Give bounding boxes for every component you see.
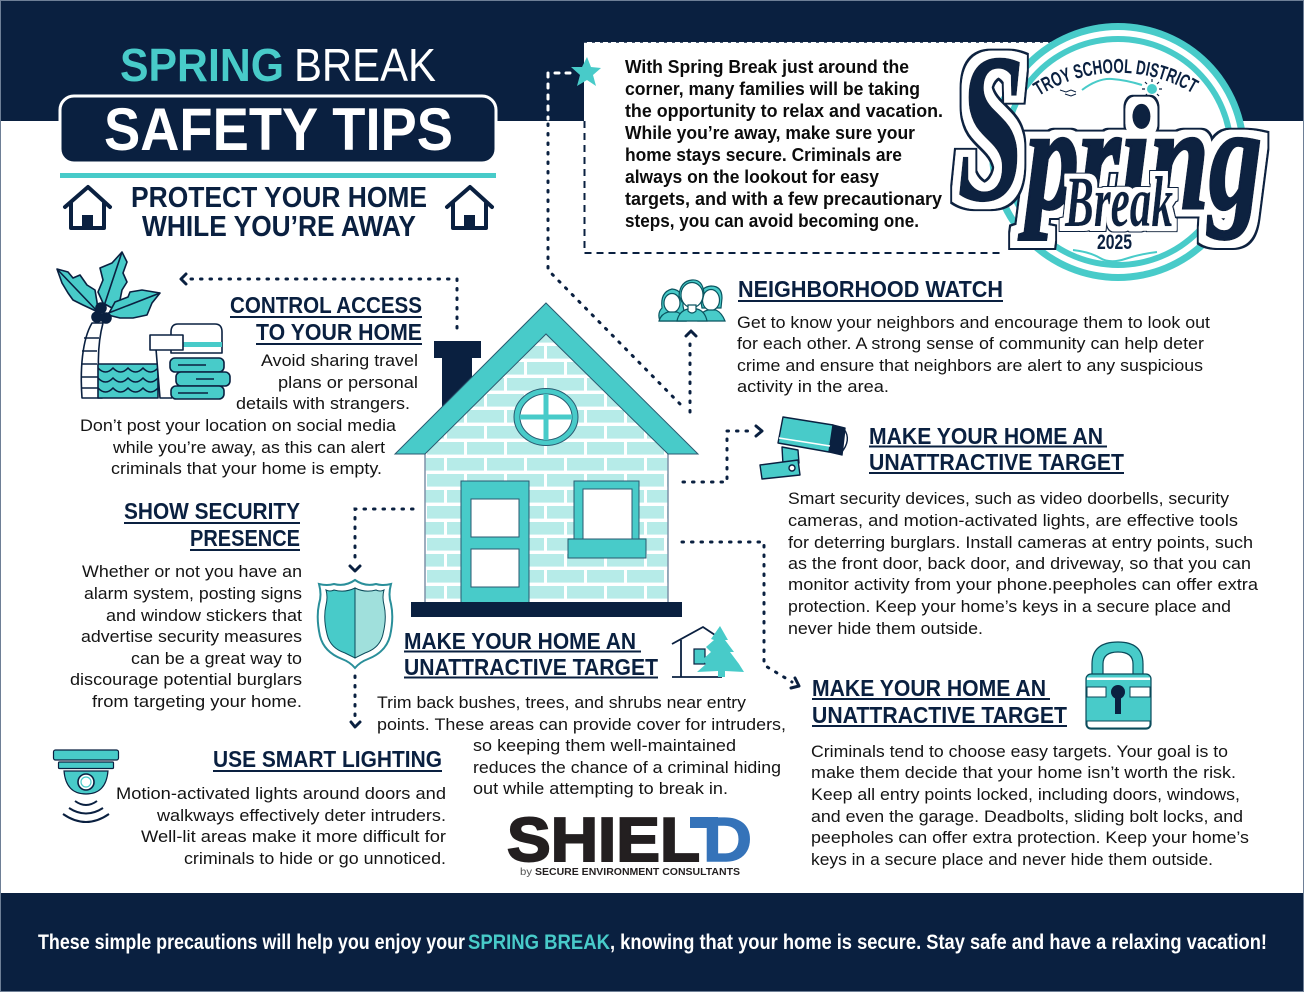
body: Whether or not you have an bbox=[82, 562, 302, 581]
subtitle: protect your home: PROTECT YOUR HOME bbox=[131, 182, 427, 214]
body bbox=[116, 784, 446, 868]
title: safety tips box: SAFETY TIPS bbox=[104, 96, 453, 163]
body bbox=[70, 562, 302, 711]
body: keys in a secure place and never hide them outside. bbox=[811, 850, 1213, 869]
body bbox=[737, 313, 1210, 396]
section: show security presence bbox=[70, 498, 302, 711]
body: for deterring burglars. Install cameras at entry points, such bbox=[788, 533, 1253, 552]
body: Smart security devices, such as video doorbells, security bbox=[788, 489, 1230, 508]
door bbox=[461, 481, 529, 603]
heading: PRESENCE bbox=[190, 525, 300, 551]
intro text bbox=[625, 57, 943, 231]
footer message: SPRING BREAK bbox=[468, 931, 610, 954]
logo: shield by secure environment consultants: by bbox=[520, 867, 532, 878]
icon: padlock bbox=[1086, 642, 1151, 729]
heading bbox=[869, 423, 1124, 475]
body bbox=[788, 489, 1259, 638]
body: Criminals tend to choose easy targets. Your goal is to bbox=[811, 742, 1228, 761]
heading bbox=[230, 292, 422, 345]
icon: security camera bbox=[760, 417, 847, 479]
body: Get to know your neighbors and encourage them to look out bbox=[737, 313, 1210, 332]
heading: TO YOUR HOME bbox=[256, 319, 422, 345]
section: easy targets bbox=[811, 675, 1249, 869]
icon: house left bbox=[65, 187, 110, 228]
heading: CONTROL ACCESS bbox=[230, 292, 422, 318]
body: so keeping them well-maintained bbox=[473, 736, 736, 755]
logo: spring break badge: TROY SCHOOL DISTRICT bbox=[1032, 58, 1200, 94]
logo: spring break badge: S bbox=[957, 8, 1025, 247]
body: walkways effectively deter intruders. bbox=[156, 806, 446, 825]
title: spring break bbox=[120, 39, 436, 91]
body: and window stickers that bbox=[106, 606, 302, 625]
dashed arrow: to security camera bbox=[683, 426, 762, 482]
heading: SHOW SECURITY bbox=[124, 498, 300, 524]
section: use smart lighting bbox=[116, 746, 446, 868]
logo: spring break badge: Break bbox=[1064, 162, 1173, 242]
section: control access bbox=[80, 292, 422, 478]
square window bbox=[568, 481, 646, 558]
body: monitor activity from your phone.peepholes can offer extra bbox=[788, 575, 1259, 594]
dashed arrow: star to neighborhood bbox=[548, 73, 696, 412]
logo: spring break badge bbox=[950, 8, 1270, 281]
roof bbox=[395, 303, 698, 454]
body: protection. Keep your home’s keys in a secure place and bbox=[788, 597, 1231, 616]
intro text: always on the lookout for easy bbox=[625, 167, 879, 187]
logo: spring break badge: 2025 bbox=[1097, 231, 1132, 254]
intro dashed panel bbox=[584, 42, 1054, 254]
body bbox=[811, 742, 1249, 869]
dashed arrow: to control access bbox=[181, 274, 457, 328]
body bbox=[377, 693, 786, 798]
title: spring break: BREAK bbox=[294, 39, 436, 91]
body: Keep all entry points locked, including doors, windows, bbox=[811, 785, 1240, 804]
icon: house and tree bbox=[672, 626, 744, 677]
section: bushes and trees bbox=[377, 628, 786, 798]
heading: MAKE YOUR HOME AN bbox=[812, 675, 1046, 701]
footer band bbox=[0, 893, 1304, 992]
icon: shield bbox=[318, 580, 392, 668]
logo: shield by secure environment consultants: D bbox=[703, 806, 752, 875]
dashed arrow: below shield bbox=[351, 676, 360, 727]
body: Trim back bushes, trees, and shrubs near entry bbox=[377, 693, 747, 712]
icon: dome camera bbox=[54, 750, 118, 822]
body: and even the garage. Deadbolts, sliding bolt locks, and bbox=[811, 807, 1243, 826]
body: while you’re away, as this can alert bbox=[112, 438, 385, 457]
heading: UNATTRACTIVE TARGET bbox=[869, 449, 1124, 475]
brick gable and walls bbox=[425, 334, 668, 603]
body: as the front door, back door, and driveway, so that you can bbox=[788, 554, 1251, 573]
body: make them decide that your home isn’t worth the risk. bbox=[811, 763, 1236, 782]
body: out while attempting to break in. bbox=[473, 779, 728, 798]
body: points. These areas can provide cover for intruders, bbox=[377, 715, 786, 734]
round window bbox=[514, 388, 578, 446]
intro text: the opportunity to relax and vacation. bbox=[625, 101, 943, 121]
body: discourage potential burglars bbox=[70, 670, 302, 689]
intro text: steps, you can avoid becoming one. bbox=[625, 211, 919, 231]
body: Motion-activated lights around doors and bbox=[116, 784, 446, 803]
body: details with strangers. bbox=[236, 394, 410, 413]
body: activity in the area. bbox=[737, 377, 889, 396]
body bbox=[80, 351, 418, 478]
body: cameras, and motion-activated lights, are effective tools bbox=[788, 511, 1238, 530]
illustration: house bbox=[395, 303, 698, 617]
body: crime and ensure that neighbors are alert to any suspicious bbox=[737, 356, 1203, 375]
icon: neighbors bbox=[659, 280, 725, 321]
footer message: These simple precautions will help you enjoy your bbox=[38, 931, 465, 954]
logo: shield by secure environment consultants: SECURE ENVIRONMENT CONSULTANTS bbox=[535, 867, 740, 878]
icon: palm tree and towels bbox=[57, 252, 230, 399]
body: plans or personal bbox=[278, 373, 418, 392]
heading: UNATTRACTIVE TARGET bbox=[812, 702, 1067, 728]
intro text: home stays secure. Criminals are bbox=[625, 145, 902, 165]
body: Well-lit areas make it more difficult for bbox=[141, 827, 446, 846]
intro text: targets, and with a few precautionary bbox=[625, 189, 942, 209]
subtitle: protect your home bbox=[131, 182, 427, 243]
section: neighborhood watch bbox=[737, 276, 1210, 396]
body: criminals to hide or go unnoticed. bbox=[184, 849, 446, 868]
foundation bbox=[411, 602, 682, 617]
footer message bbox=[38, 931, 1267, 954]
heading: NEIGHBORHOOD WATCH bbox=[738, 276, 1003, 302]
body: for each other. A strong sense of community can help deter bbox=[737, 334, 1204, 353]
body: alarm system, posting signs bbox=[84, 584, 302, 603]
dashed arrow: to security presence bbox=[350, 509, 413, 571]
heading bbox=[124, 498, 300, 551]
section: smart security devices bbox=[788, 423, 1259, 638]
dashed arrow: to lock bbox=[682, 542, 799, 688]
body: criminals that your home is empty. bbox=[111, 459, 382, 478]
heading: MAKE YOUR HOME AN bbox=[404, 628, 636, 654]
heading bbox=[404, 628, 658, 680]
body: never hide them outside. bbox=[788, 619, 983, 638]
heading: MAKE YOUR HOME AN bbox=[869, 423, 1103, 449]
heading: UNATTRACTIVE TARGET bbox=[404, 654, 658, 680]
body: can be a great way to bbox=[131, 649, 302, 668]
heading bbox=[812, 675, 1067, 728]
body: Don’t post your location on social media bbox=[80, 416, 397, 435]
intro text: corner, many families will be taking bbox=[625, 79, 920, 99]
subtitle: protect your home: WHILE YOU’RE AWAY bbox=[142, 211, 416, 243]
logo: shield by secure environment consultants: SHIEL bbox=[507, 806, 700, 875]
body: from targeting your home. bbox=[92, 692, 302, 711]
icon: star bbox=[571, 57, 601, 86]
body: reduces the chance of a criminal hiding bbox=[473, 758, 781, 777]
body: peepholes can offer extra protection. Keep your home’s bbox=[811, 828, 1249, 847]
header band bbox=[0, 0, 1304, 121]
title: spring break: SPRING bbox=[120, 39, 284, 91]
intro text: With Spring Break just around the bbox=[625, 57, 909, 77]
heading: USE SMART LIGHTING bbox=[213, 746, 442, 772]
body: Avoid sharing travel bbox=[261, 351, 418, 370]
body: advertise security measures bbox=[81, 627, 302, 646]
chimney bbox=[434, 341, 481, 412]
icon: house right bbox=[447, 187, 492, 228]
intro text: While you’re away, make sure your bbox=[625, 123, 915, 143]
